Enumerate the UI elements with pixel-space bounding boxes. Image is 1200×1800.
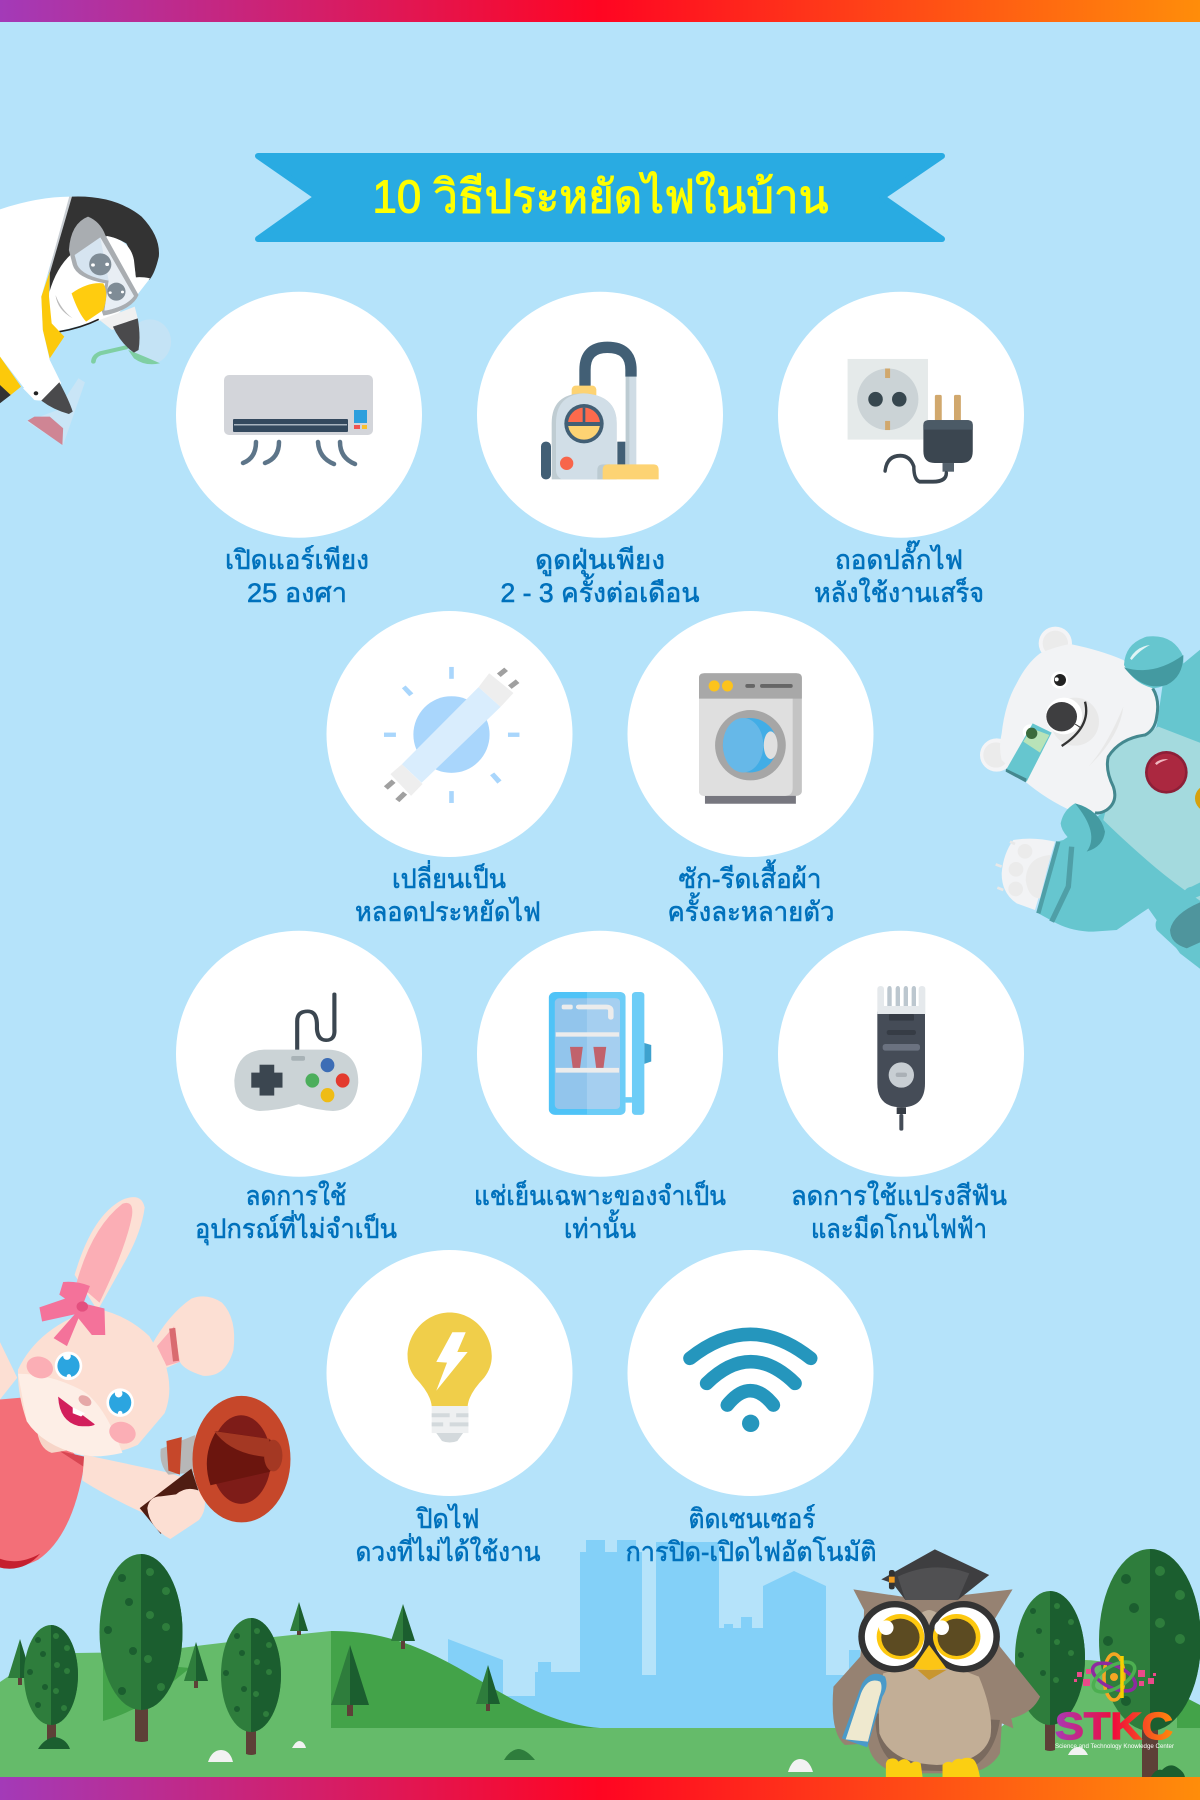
label [500,545,700,608]
label: ลดการใช้แปรงสีฟัน [791,1180,1007,1211]
circle [176,292,422,538]
icon: socket and plug [848,359,973,482]
label: หลังใช้งานเสร็จ [814,575,984,608]
circle [326,611,572,857]
top gradient bar [0,0,1200,22]
label: ถอดปลั๊กไฟ [835,540,963,575]
circle [477,292,723,538]
icon: refrigerator [549,992,651,1115]
label [791,1180,1007,1244]
STKC logo [1055,1654,1174,1750]
label: ซัก-รีดเสื้อผ้า [678,859,822,894]
logo atom [1074,1654,1156,1700]
logo wordmark: STKC [1055,1706,1173,1748]
circle [477,931,723,1177]
label [474,1178,726,1244]
circle [778,292,1024,538]
rabbit with megaphone [0,1197,290,1569]
circle [628,1250,874,1496]
label: อุปกรณ์ที่ไม่จำเป็น [195,1210,397,1246]
icon: fluorescent tube [384,667,519,803]
circle [176,931,422,1177]
panel: vacuum cleaner [477,292,723,608]
polar bear robot [980,627,1200,970]
circle [778,931,1024,1177]
panel: refrigerator [474,931,726,1244]
label [626,1503,876,1567]
label [355,860,541,927]
label: ครั้งละหลายตัว [668,892,834,927]
label: ดวงที่ไม่ได้ใช้งาน [356,1533,540,1567]
label: ลดการใช้ [246,1180,346,1211]
label: หลอดประหยัดไฟ [355,897,541,927]
icon: air conditioner [224,375,373,464]
panel: game controller [176,931,422,1246]
circle [326,1250,572,1496]
icon: wifi [690,1334,811,1432]
logo caption: Science and Technology Knowledge Center [1055,1744,1174,1750]
icon: electric trimmer [877,986,925,1131]
label [814,540,984,608]
label: 25 องศา [247,578,347,608]
icon: vacuum cleaner [541,347,659,479]
city skyline [448,1540,860,1735]
icon: game controller [234,994,358,1111]
panel: unplug [778,292,1024,608]
panel: air conditioner [176,292,422,608]
label: ปิดไฟ [416,1504,480,1534]
label: แช่เย็นเฉพาะของจำเป็น [474,1178,726,1211]
pine trees [8,1602,500,1716]
title: 10 วิธีประหยัดไฟในบ้าน [372,170,828,222]
label: ดูดฝุ่นเพียง [535,545,665,577]
label [668,859,834,927]
label [195,1180,397,1246]
panel: washing machine [628,611,874,927]
icon: light bulb [408,1312,492,1443]
landscape hills [0,1631,1200,1778]
owl with book [833,1549,1040,1777]
banner [258,156,942,239]
label [225,544,369,608]
label: และมีดโกนไฟฟ้า [811,1214,987,1244]
panel: wifi sensor [626,1250,876,1567]
label: การปิด-เปิดไฟอัตโนมัติ [626,1537,876,1567]
round trees [24,1549,1200,1777]
bushes and rocks [38,1737,1185,1777]
circle [628,611,874,857]
bottom gradient bar [0,1777,1200,1800]
icon: washing machine [699,673,802,804]
label [356,1504,540,1567]
label: เปลี่ยนเป็น [392,860,506,894]
label: เปิดแอร์เพียง [225,544,369,575]
label: เท่านั้น [564,1209,636,1244]
panel: light bulb [326,1250,572,1567]
label: 2 - 3 ครั้งต่อเดือน [500,573,700,608]
panel: energy-saving tube [326,611,572,927]
penguin scientist [0,197,171,445]
panel: electric trimmer [778,931,1024,1244]
label: ติดเซนเซอร์ [688,1503,816,1534]
